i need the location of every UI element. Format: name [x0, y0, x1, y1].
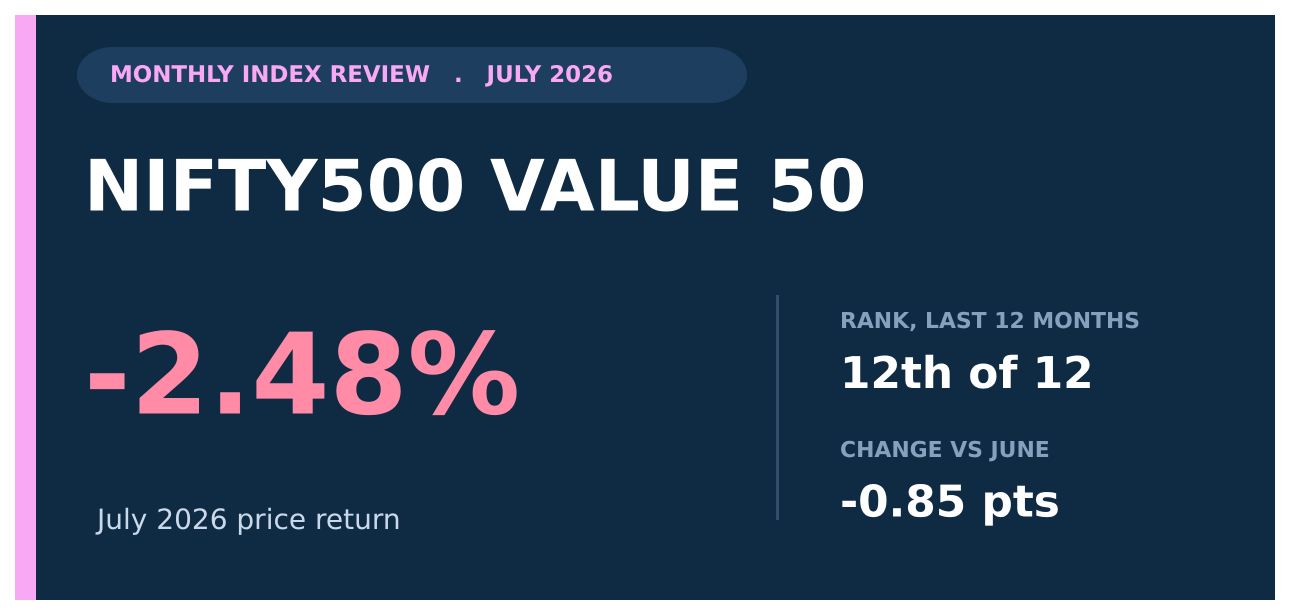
stat: change: [840, 438, 1060, 528]
header pill: [77, 47, 747, 103]
title: NIFTY500 VALUE 50: [84, 144, 866, 228]
accent bar: [15, 15, 36, 600]
main figure: -2.48%: [84, 310, 520, 440]
header pill: MONTHLY INDEX REVIEW . JULY 2026: [110, 62, 613, 88]
stat: change: -0.85 pts: [840, 476, 1060, 528]
stat: rank: RANK, LAST 12 MONTHS: [840, 309, 1140, 334]
stat: rank: [840, 309, 1140, 399]
main figure caption: July 2026 price return: [95, 503, 401, 536]
vertical divider: [776, 295, 779, 520]
stat: change: CHANGE VS JUNE: [840, 438, 1050, 463]
stat: rank: 12th of 12: [840, 348, 1094, 399]
